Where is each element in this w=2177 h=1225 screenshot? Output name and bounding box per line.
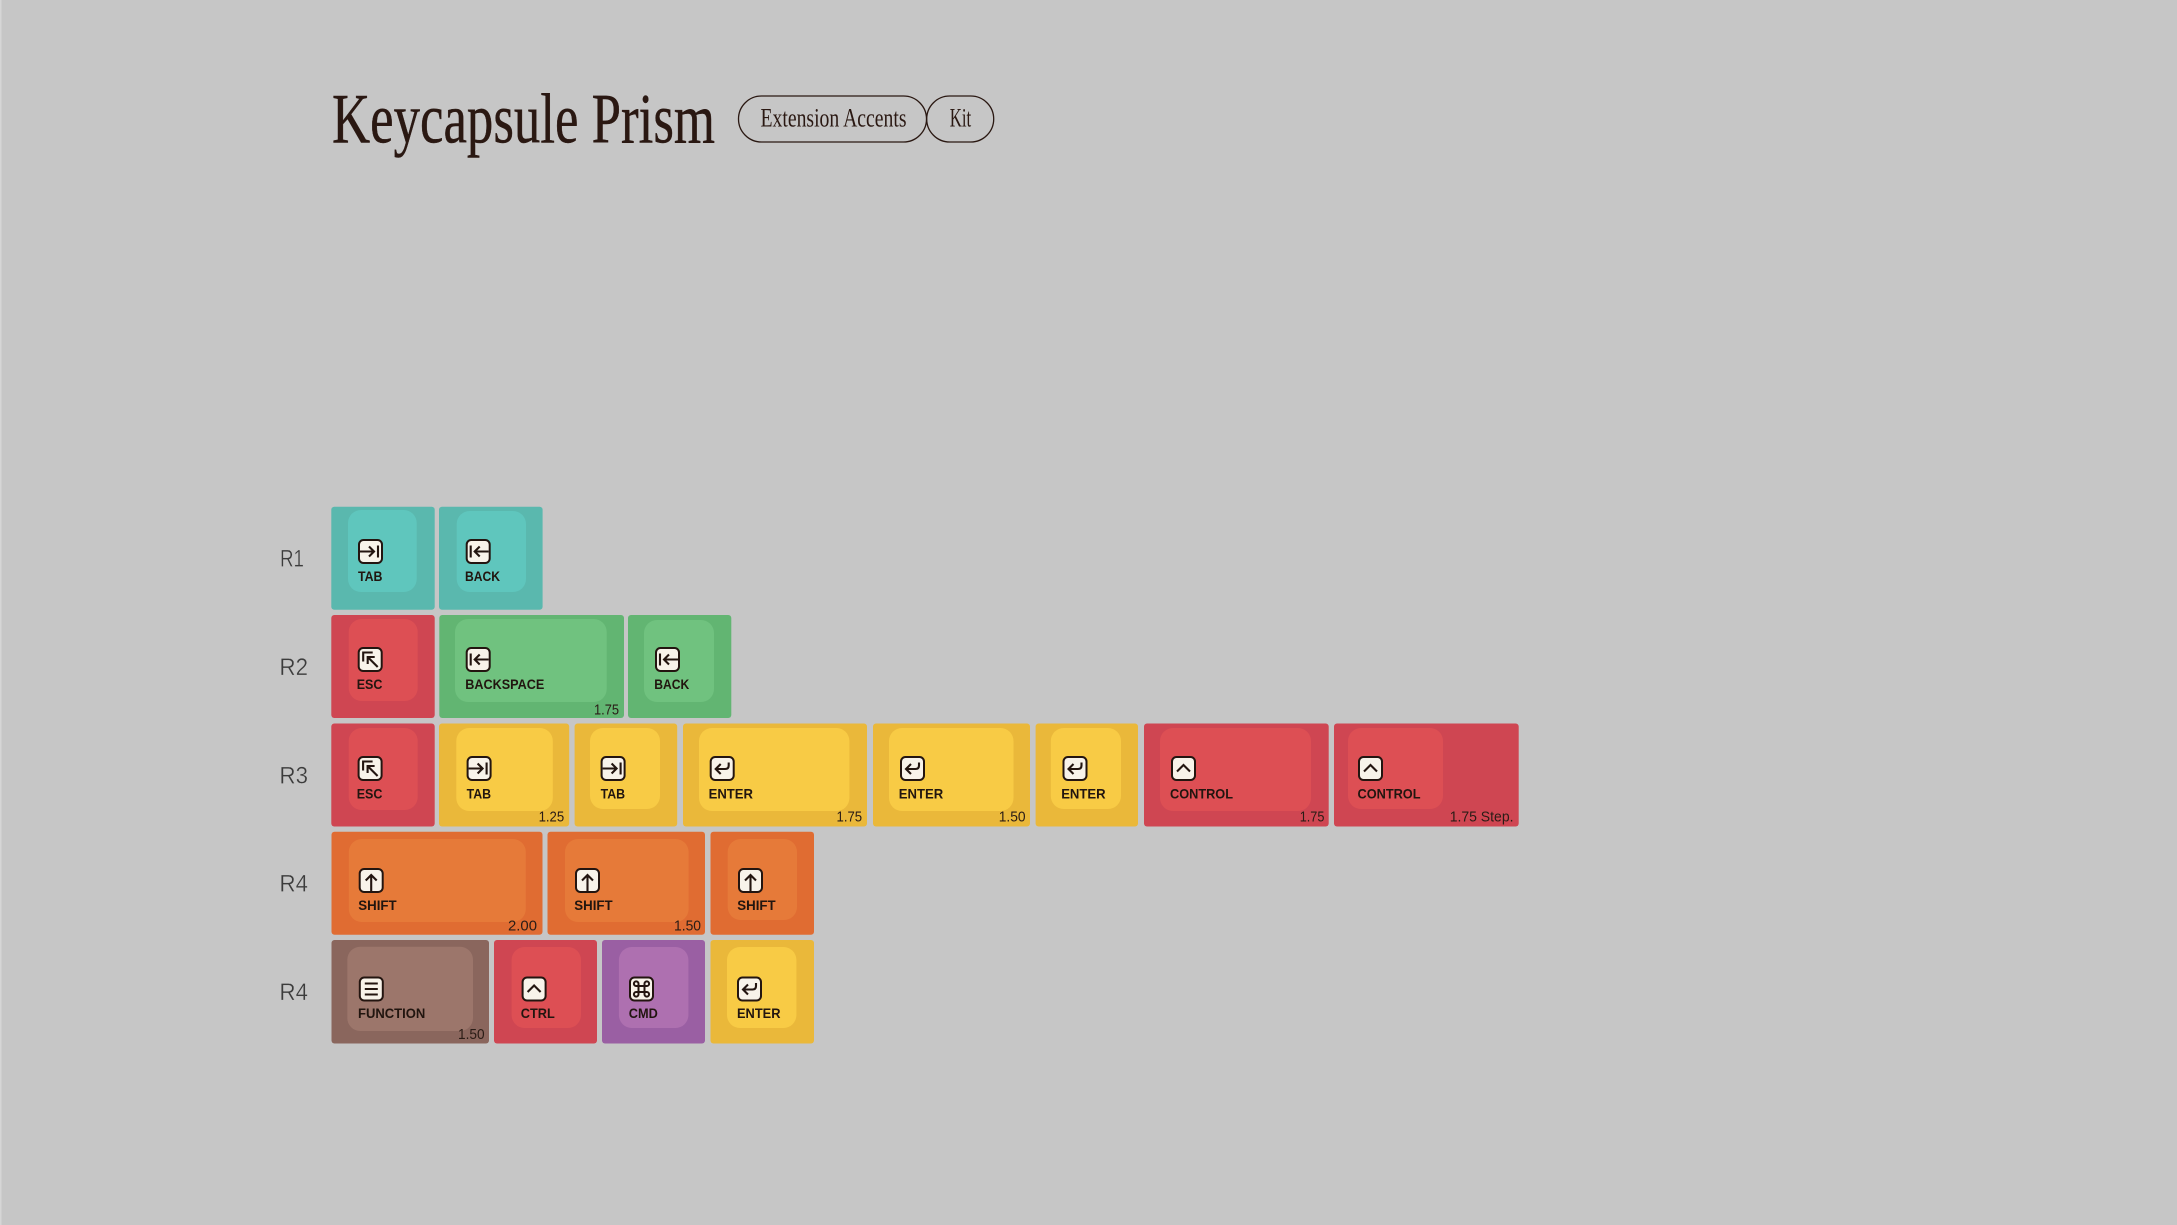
key row R3 <box>331 724 1519 826</box>
title: Keycapsule Prism <box>332 80 715 158</box>
key: ESC <box>331 615 435 718</box>
pill: Kit <box>927 96 994 142</box>
key: BACKSPACE: BACKSPACE <box>465 677 544 692</box>
key: ENTER 1.50: ENTER <box>899 786 943 801</box>
key: TAB 1.25 <box>439 724 569 826</box>
key: BACK: BACK <box>654 677 689 692</box>
key: CTRL: CTRL <box>521 1006 555 1021</box>
key: CONTROL 1.75 stepped <box>1334 724 1519 826</box>
key: ENTER 1.75: 1.75 <box>836 809 862 826</box>
row label R3: R3 <box>280 762 308 789</box>
key: ENTER: ENTER <box>1061 786 1106 801</box>
key: TAB: TAB <box>601 786 625 801</box>
key: BACKSPACE: 1.75 <box>594 701 619 718</box>
pill: Kit: Kit <box>950 102 972 132</box>
key row R4 second <box>332 940 814 1044</box>
key: CONTROL 1.75 <box>1144 724 1329 826</box>
key: SHIFT 1.50 <box>548 832 705 935</box>
pill: Extension Accents <box>738 96 926 142</box>
key: ESC: ESC <box>357 677 382 692</box>
key: SHIFT 1.50: SHIFT <box>574 898 613 913</box>
key: ENTER 1.75: ENTER <box>709 786 753 801</box>
key: FUNCTION 1.50: 1.50 <box>458 1026 485 1043</box>
key: CONTROL 1.75: CONTROL <box>1170 786 1233 801</box>
pill: Extension Accents: Extension Accents <box>760 102 906 132</box>
key: ENTER <box>1036 724 1138 826</box>
key: CTRL <box>494 940 597 1044</box>
key: FUNCTION 1.50 <box>332 940 489 1044</box>
key: CONTROL 1.75 stepped: CONTROL <box>1358 786 1420 801</box>
key: CONTROL 1.75 stepped: 1.75 Step. <box>1450 809 1514 826</box>
key: SHIFT 2.00 <box>332 832 542 935</box>
row label R4: R4 <box>280 871 308 898</box>
row label R2: R2 <box>280 654 308 681</box>
key: SHIFT 1.50: 1.50 <box>674 918 701 934</box>
key: CMD <box>602 940 705 1044</box>
key: TAB 1.25: TAB <box>467 786 491 801</box>
key: ENTER 1.50 <box>873 724 1030 826</box>
key: BACK <box>439 507 543 610</box>
key: FUNCTION 1.50: FUNCTION <box>358 1006 425 1021</box>
key: ENTER <box>710 940 814 1044</box>
key: SHIFT: SHIFT <box>737 898 776 913</box>
key: ENTER 1.50: 1.50 <box>999 809 1026 826</box>
key: SHIFT 2.00: 2.00 <box>508 918 537 934</box>
key: TAB 1.25: 1.25 <box>539 809 564 826</box>
key row R2 <box>331 615 731 718</box>
key: TAB <box>575 724 677 826</box>
key: SHIFT 2.00: SHIFT <box>358 898 397 913</box>
key: ENTER: ENTER <box>737 1006 781 1021</box>
row label R4 second: R4 <box>280 979 308 1006</box>
key: SHIFT <box>710 832 814 935</box>
key row R1 <box>331 507 543 610</box>
key: ESC <box>331 724 435 826</box>
key: TAB: TAB <box>358 569 383 584</box>
key: ESC: ESC <box>357 786 382 801</box>
key: BACK <box>628 615 731 718</box>
key: ENTER 1.75 <box>683 724 867 826</box>
row label R1: R1 <box>280 546 304 573</box>
key: CMD: CMD <box>629 1006 658 1021</box>
key row R4 <box>332 832 814 935</box>
key: BACK: BACK <box>465 569 500 584</box>
key: CONTROL 1.75: 1.75 <box>1300 809 1324 826</box>
key: BACKSPACE <box>439 615 624 718</box>
key: TAB <box>331 507 435 610</box>
